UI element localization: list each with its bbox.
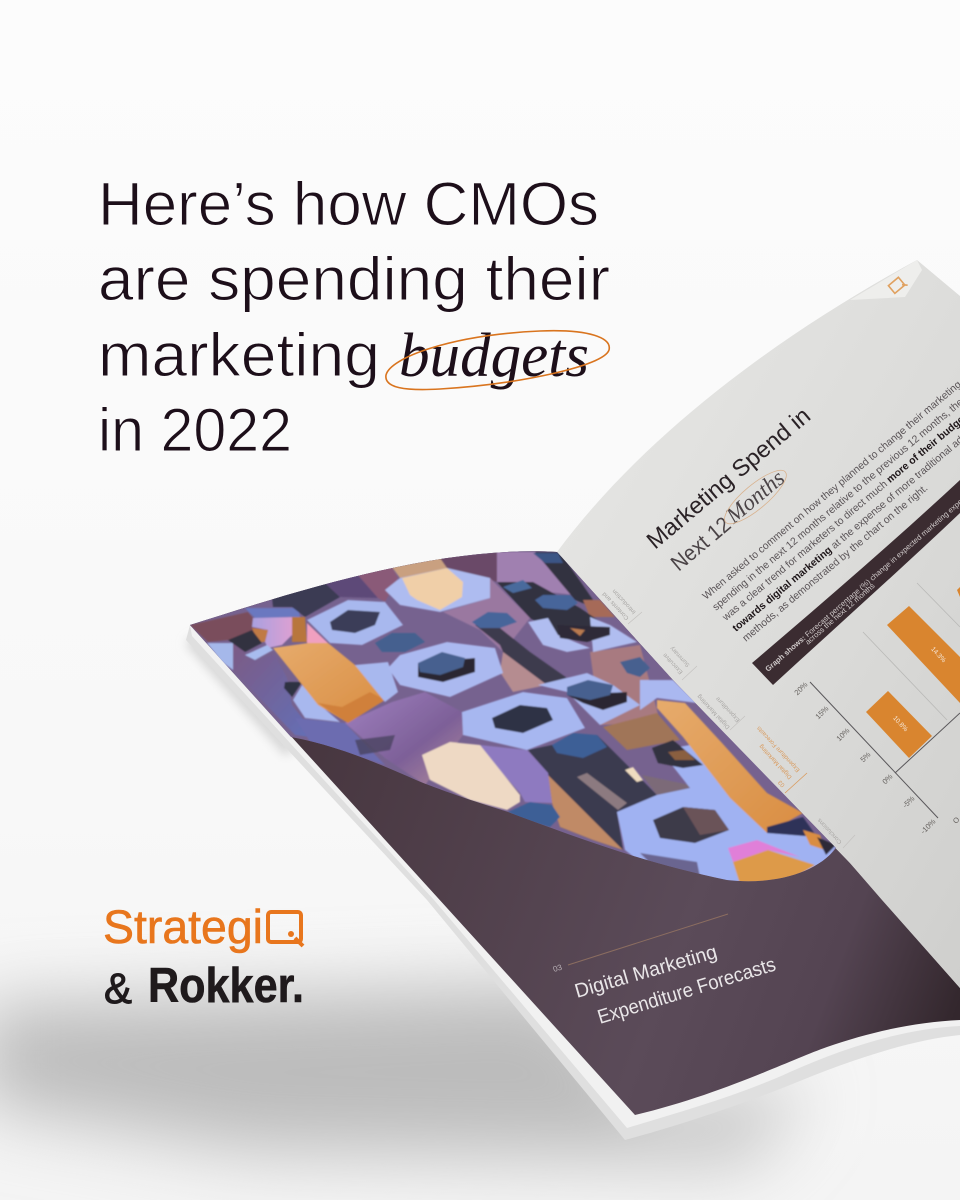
- under pages: [186, 625, 960, 1140]
- side navigation: Contents and: [602, 591, 630, 621]
- axis labels: -10%: [919, 817, 938, 836]
- left page: [190, 551, 960, 1115]
- blue caps lower: [552, 733, 607, 758]
- side navigation: Executive: [662, 651, 684, 675]
- page heading: Months: [720, 465, 789, 529]
- soft shadow beneath brochure: [0, 985, 810, 1160]
- side navigation: Introduction: [612, 588, 637, 615]
- side navigation: Summary: [670, 645, 691, 668]
- title: [98, 170, 610, 464]
- side navigation: [602, 588, 855, 848]
- bar labels: 10.8%: [891, 715, 909, 733]
- cream hexagon lower: [480, 745, 552, 803]
- title: in 2022: [98, 396, 292, 464]
- cover artwork: hexagons: [190, 551, 836, 882]
- side navigation: Expenditure Forecasts: [756, 725, 801, 773]
- bar labels: 14.3%: [929, 646, 947, 664]
- left pink and orange panels: [252, 617, 298, 648]
- highlighted word: budgets: budgets: [399, 322, 589, 390]
- side navigation: Digital Marketing: [759, 743, 793, 780]
- axis labels: 0%: [880, 772, 895, 786]
- left page section title: Expenditure Forecasts: [595, 954, 778, 1029]
- hexagon ring: lower left: [293, 685, 340, 722]
- graph caption bar: across the next 12 months: [803, 581, 877, 647]
- right page content: [602, 260, 960, 848]
- title: marketing: [98, 321, 380, 389]
- axis labels: -5%: [901, 794, 917, 810]
- large lavender ring lower right: [617, 745, 836, 888]
- corner tab and logo mark: [850, 260, 922, 300]
- background blocks: [190, 612, 265, 642]
- axis labels: 5%: [858, 750, 873, 764]
- title: Here’s how CMOs: [98, 170, 599, 238]
- blue hexagon cap: [375, 633, 425, 652]
- logo: Rokker: &: [104, 965, 132, 1013]
- axis labels: [792, 680, 960, 836]
- hexagon ring: top left: [307, 600, 403, 645]
- orange column left: [273, 643, 385, 723]
- axis labels: 20%: [792, 680, 810, 697]
- upper right rings and caps: [528, 618, 590, 652]
- logo: Rokker: Rokker.: [148, 959, 304, 1013]
- hexagon ring: centre: [462, 692, 585, 750]
- side navigation: Conclusions: [817, 817, 843, 845]
- pink and orange lower corner: [728, 840, 800, 862]
- page heading: Marketing Spend in: [642, 402, 815, 554]
- left page section title: [552, 914, 778, 1029]
- bar labels: [891, 646, 947, 733]
- side navigation: Expenditure: [715, 695, 741, 723]
- bars: [866, 587, 960, 758]
- orange column right: [640, 680, 697, 710]
- intro paragraph: When asked to comment on how they planned to change their marketing: [701, 379, 960, 602]
- right page: [557, 260, 960, 988]
- title: are spending their: [98, 245, 610, 313]
- side navigation: 03: [777, 778, 786, 788]
- intro paragraph: methods, as demonstrated by the chart on the right.: [741, 483, 930, 644]
- axis labels: 15%: [813, 704, 831, 721]
- left page section title: 03: [552, 963, 564, 974]
- logo: StrategiQ: Strategi: [103, 900, 263, 953]
- brochure: [180, 260, 960, 1140]
- dark columns: [497, 581, 597, 636]
- axis labels: 10%: [834, 726, 852, 743]
- intro paragraph: towards digital marketing at the expense of more traditional ad: [731, 435, 960, 634]
- left page section title: Digital Marketing: [572, 941, 720, 1003]
- hexagon ring: centre left: [355, 662, 398, 702]
- page heading: Next 12: [666, 512, 735, 576]
- bar chart: [792, 583, 960, 836]
- side navigation: Digital Marketing: [697, 693, 731, 730]
- hexagon ring: cream centre: [385, 568, 490, 612]
- hexagon ring: right of centre: [538, 673, 640, 725]
